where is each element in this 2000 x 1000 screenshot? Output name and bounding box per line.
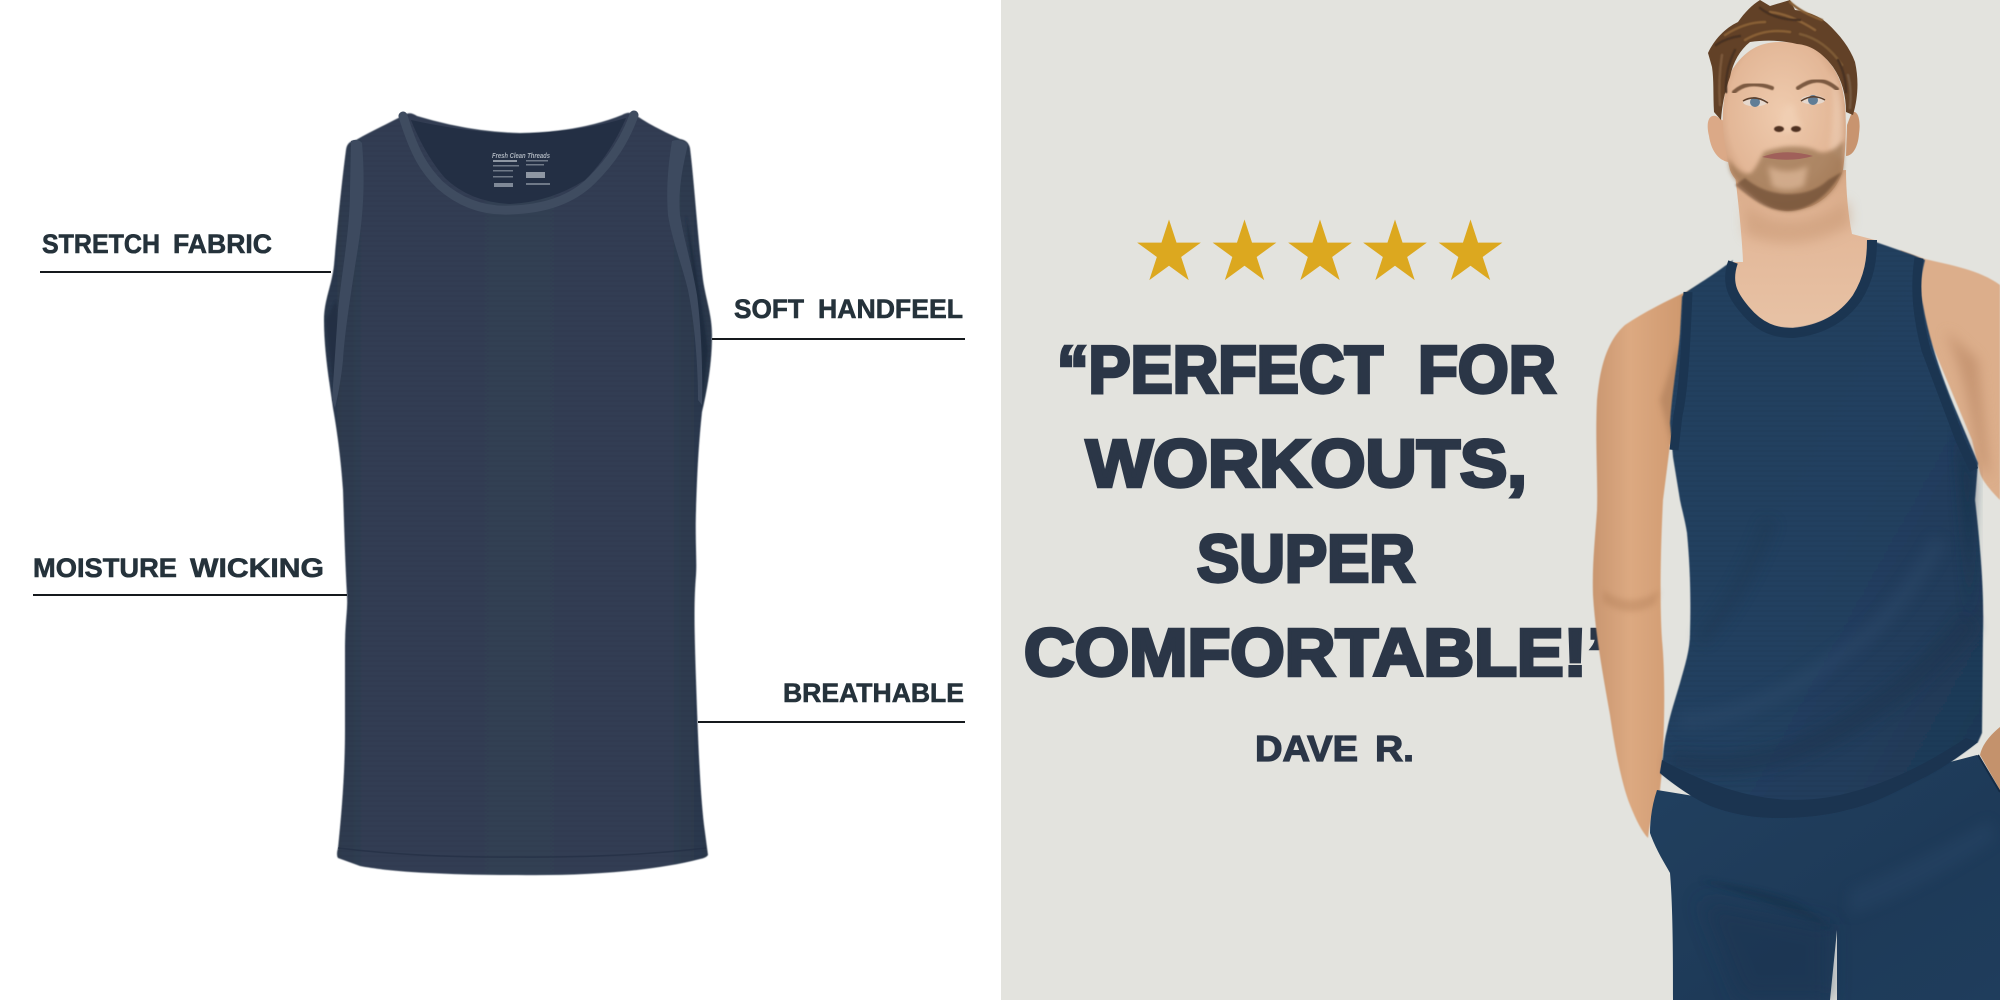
callout: soft handfeel: SOFT	[734, 294, 804, 324]
armhole trim left	[1674, 292, 1688, 450]
mouth	[1762, 152, 1813, 160]
right ear	[1846, 112, 1860, 156]
face	[1723, 42, 1846, 211]
hem stitch	[338, 848, 706, 857]
eyes	[1743, 98, 1767, 106]
callout: stretch fabric: FABRIC	[173, 229, 272, 259]
tank body	[324, 113, 712, 875]
inner back neck	[411, 118, 626, 204]
callout: soft handfeel	[712, 294, 965, 340]
quote headline: “PERFECT	[1057, 334, 1383, 408]
model wearing tank top	[1593, 0, 2000, 1000]
quote headline: COMFORTABLE!”	[1024, 616, 1622, 690]
neck trim	[1730, 240, 1872, 333]
collar trim	[403, 115, 634, 210]
callout: moisture wicking	[33, 553, 347, 596]
tank body on model	[1660, 240, 1983, 818]
fabric folds	[1680, 540, 1940, 720]
right hand in pocket	[1980, 727, 2000, 790]
quote headline: SUPER	[1197, 522, 1415, 596]
callout: moisture wicking: WICKING	[190, 553, 324, 583]
rating: five gold stars	[1137, 220, 1502, 280]
right armhole trim	[667, 140, 702, 405]
face side shading	[1830, 70, 1844, 160]
callout: stretch fabric: STRETCH	[42, 229, 160, 259]
right armhole shadow	[686, 215, 708, 408]
shorts	[1650, 755, 2000, 1000]
callout: soft handfeel: HANDFEEL	[818, 294, 963, 324]
hair texture	[1716, 2, 1851, 108]
panel: customer review	[1001, 0, 2000, 1000]
left arm	[1593, 285, 1700, 838]
armhole trim right	[1917, 258, 1974, 470]
callout: stretch fabric	[40, 229, 331, 273]
callout: moisture wicking: MOISTURE	[33, 553, 177, 583]
callout: breathable: BREATHABLE	[783, 678, 964, 708]
neck label: Fresh Clean Threads	[492, 153, 550, 160]
eyebrows	[1734, 84, 1772, 92]
beard stubble	[1728, 140, 1844, 211]
left ear	[1708, 116, 1730, 162]
hair	[1708, 0, 1857, 120]
left armhole trim	[332, 140, 364, 408]
quote headline: FOR	[1418, 334, 1556, 408]
quote headline	[1024, 334, 1622, 690]
nose	[1777, 105, 1802, 132]
quote headline: WORKOUTS,	[1086, 428, 1527, 502]
right arm and shoulder	[1900, 250, 2000, 500]
garment: navy tank top	[324, 113, 712, 875]
neck and chest	[1725, 170, 1875, 335]
panel: product features	[0, 0, 1001, 1000]
reviewer name: R.	[1375, 728, 1414, 769]
left armhole shadow	[326, 300, 342, 400]
hem band	[1660, 738, 1978, 818]
reviewer name	[1255, 728, 1414, 769]
head	[1708, 0, 1860, 211]
reviewer name: DAVE	[1255, 728, 1358, 769]
neck label	[492, 153, 550, 187]
